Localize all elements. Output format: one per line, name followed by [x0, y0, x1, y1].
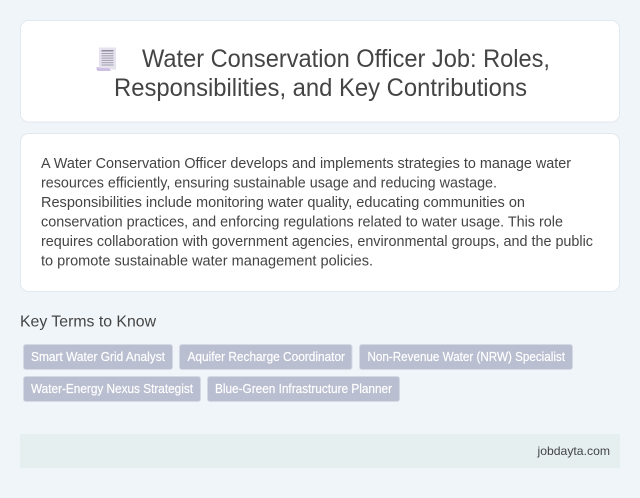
tag: non-revenue water specialist [360, 344, 572, 370]
tag: blue-green infrastructure planner: Blue-Green Infrastructure Planner [215, 382, 392, 396]
text block: description: Responsibilities include monitoring water quality, educating communities on [41, 195, 525, 211]
heading: key terms: Key Terms to Know [20, 314, 156, 330]
text block: description: A Water Conservation Officer develops and implements strategies to manage water [41, 156, 571, 172]
tag: non-revenue water specialist: Non-Revenue Water (NRW) Specialist [368, 350, 565, 364]
tag: water-energy nexus strategist: Water-Energy Nexus Strategist [31, 382, 193, 396]
text block: description: resources efficiently, ensuring sustainable usage and reducing wastage. [41, 176, 497, 192]
tag: smart water grid analyst [24, 344, 172, 370]
text block: description: requires collaboration with government agencies, environmental groups, and the public [41, 234, 593, 250]
heading: title [114, 45, 550, 102]
heading: title: Water Conservation Officer Job: Roles, [142, 45, 550, 73]
text block: description: to promote sustainable water management policies. [41, 254, 373, 270]
tag list: key terms [24, 344, 572, 402]
panel: description card [20, 134, 620, 292]
tag: aquifer recharge coordinator: Aquifer Recharge Coordinator [188, 350, 345, 364]
tag: blue-green infrastructure planner [208, 376, 400, 402]
text block: description: conservation practices, and enforcing regulations related to water usage. This role [41, 214, 563, 230]
heading: title: Responsibilities, and Key Contributions [114, 74, 527, 102]
tag: smart water grid analyst: Smart Water Grid Analyst [31, 350, 165, 364]
panel: title card [20, 20, 620, 122]
tag: water-energy nexus strategist [24, 376, 200, 402]
tag: aquifer recharge coordinator [180, 344, 352, 370]
text block: description [41, 156, 593, 270]
icon: scroll document [96, 48, 116, 71]
footer source text: jobdayta.com [536, 444, 610, 458]
footer bar [20, 434, 620, 468]
